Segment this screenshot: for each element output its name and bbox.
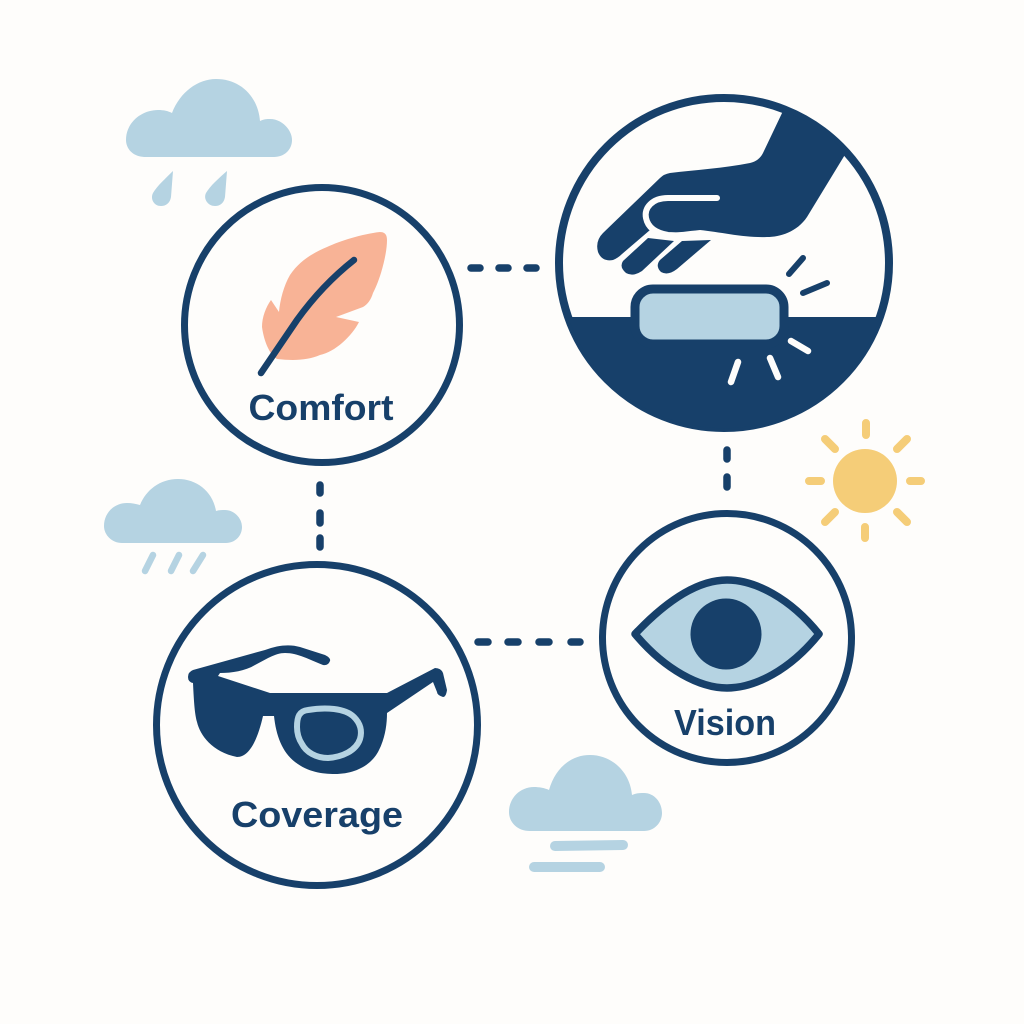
icon: hand bbox=[597, 111, 846, 275]
panel: hand pressing bbox=[559, 98, 889, 428]
impact lines upper bbox=[789, 258, 827, 293]
panel: comfort bbox=[184, 188, 460, 462]
connector: hand to vision bbox=[723, 450, 731, 487]
label: coverage: Coverage bbox=[231, 794, 403, 835]
dark ground bbox=[568, 317, 880, 428]
connector: comfort to hand bbox=[471, 264, 536, 272]
impact lines lower bbox=[731, 341, 808, 382]
icon: sunglasses bbox=[188, 645, 447, 774]
panel: coverage bbox=[156, 564, 478, 886]
icon: fog cloud bottom bbox=[509, 755, 662, 867]
connector: coverage to vision bbox=[478, 638, 580, 646]
label: comfort: Comfort bbox=[248, 387, 394, 428]
icon: rain cloud top left bbox=[126, 79, 292, 206]
icon: rain cloud middle left bbox=[104, 479, 242, 571]
label: vision: Vision bbox=[674, 702, 776, 743]
icon: button bbox=[635, 289, 784, 344]
icon: eye bbox=[635, 580, 819, 688]
connector: comfort to coverage bbox=[316, 485, 324, 547]
panel: vision bbox=[602, 514, 852, 762]
icon: feather bbox=[261, 232, 387, 373]
icon: sun bbox=[809, 423, 921, 538]
